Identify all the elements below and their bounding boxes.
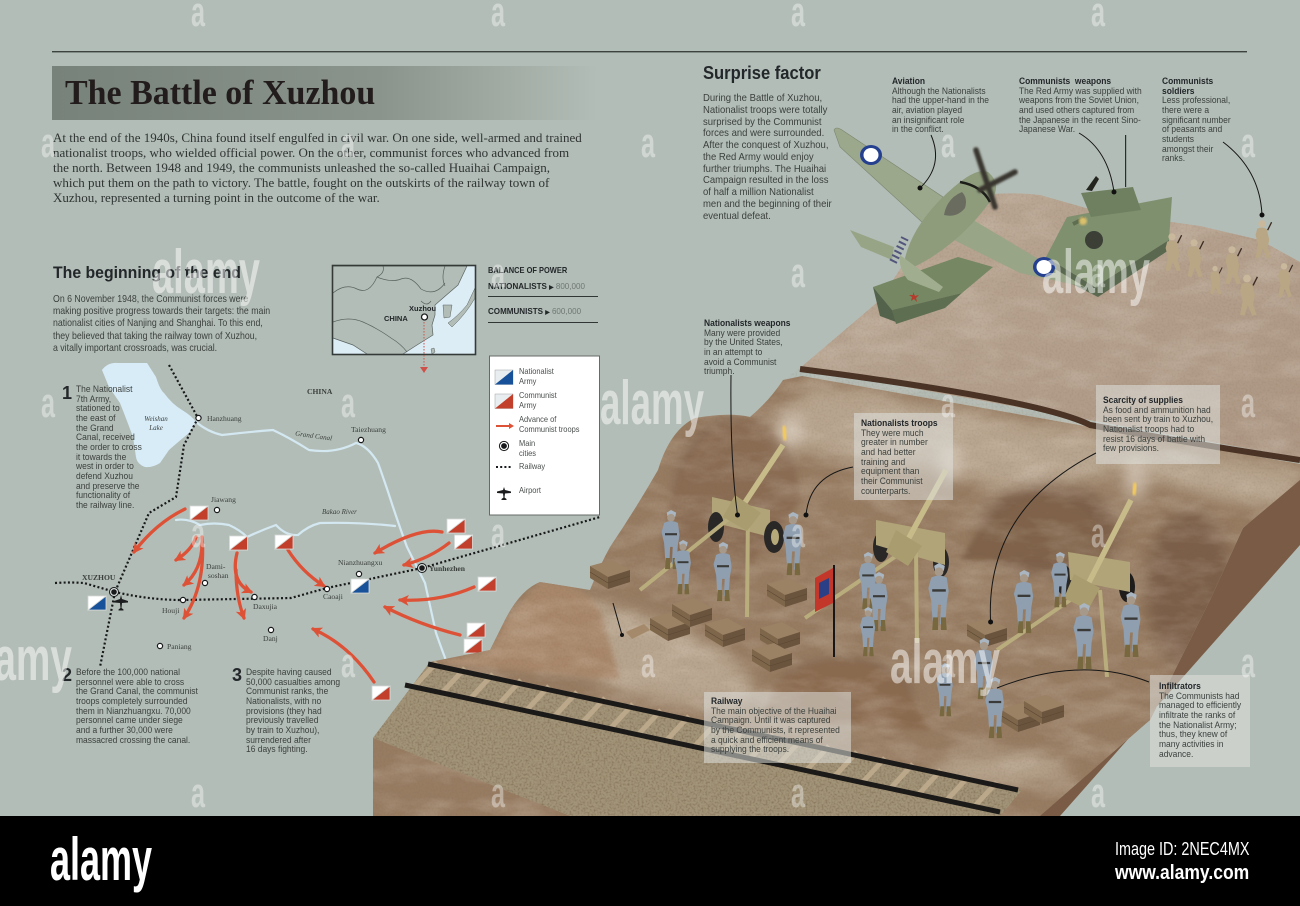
text: the beginning of the end: nationalist cities of Nanjing and Shanghai. To this end, xyxy=(53,318,263,329)
text: the beginning of the end: making positive progress towards their targets: the main xyxy=(53,306,270,317)
callout leader lines xyxy=(613,133,1262,688)
text: surprise factor: of half a million Nationalist xyxy=(703,187,814,198)
text: surprise factor: Nationalist troops were totally xyxy=(703,105,827,116)
step 1 text: The Nationalist xyxy=(76,384,132,394)
step 1 text: Canal, received xyxy=(76,432,135,442)
callout text: infiltrators: The Communists had xyxy=(1159,691,1239,701)
watermark: a xyxy=(491,771,506,817)
map labels: Jiawang xyxy=(211,495,236,504)
diorama: front soil side xyxy=(373,738,570,816)
step 1 text: defend Xuzhou xyxy=(76,471,133,481)
callout text: nationalists troops: counterparts. xyxy=(861,486,910,496)
map labels: Caoaji xyxy=(323,592,343,601)
map: advance arrows xyxy=(134,509,474,682)
callout: communists weapons xyxy=(1019,76,1142,134)
legend label: cities: cities xyxy=(519,449,536,458)
text: surprise factor: forces and were surrounded. xyxy=(703,128,824,139)
watermark: a xyxy=(1091,771,1106,817)
callout: nationalists weapons: in an attempt to xyxy=(704,347,762,357)
map labels: Nianzhuangxu xyxy=(338,558,382,567)
map labels: Daxujia xyxy=(253,602,277,611)
callout text: infiltrators: infiltrate the ranks of xyxy=(1159,710,1235,720)
callout: nationalists weapons: Many were provided xyxy=(704,328,780,338)
callout: aviation: Although the Nationalists xyxy=(892,86,986,96)
step 3 text: 50,000 casualties among xyxy=(246,677,340,687)
diorama: nationalist soldiers xyxy=(662,510,1140,738)
callout text: nationalists troops: They were much xyxy=(861,428,924,438)
text: surprise factor xyxy=(703,93,832,222)
diorama: howitzer 3 xyxy=(997,483,1136,677)
diorama: rails xyxy=(405,664,1018,812)
balance of power: BALANCE OF POWER xyxy=(488,265,567,275)
map labels: Hanzhuang xyxy=(207,414,242,423)
diorama: fighter plane xyxy=(834,128,1085,292)
text: the beginning of the end: On 6 November 1948, the Communist forces were xyxy=(53,294,248,305)
legend labels: Army xyxy=(519,377,536,386)
callout: nationalists weapons: triumph. xyxy=(704,366,735,376)
map: lake xyxy=(102,363,196,467)
callout: communists weapons: Communists weapons xyxy=(1019,76,1111,86)
callout text: nationalists troops: Nationalists troops xyxy=(861,418,938,428)
callout text: railway: Campaign. Until it was captured xyxy=(711,715,830,725)
step 2 text: them in Nianzhuangxu. 70,000 xyxy=(76,706,191,716)
watermark: a xyxy=(41,381,56,427)
step 1 text: functionality of xyxy=(76,490,130,500)
footer bar: alamy xyxy=(50,826,152,893)
text: the beginning of the end: a vitally important crossroads, was crucial. xyxy=(53,343,217,354)
step 1 text: stationed to xyxy=(76,403,120,413)
diorama: howitzer 1 xyxy=(640,426,786,617)
callout: communists soldiers: there were a xyxy=(1162,105,1209,115)
map labels: Paniang xyxy=(167,642,191,651)
step 3 text: 16 days fighting. xyxy=(246,744,308,754)
step 1 text: the Grand xyxy=(76,423,114,433)
watermark: alamy xyxy=(1042,238,1150,307)
watermark: a xyxy=(791,511,806,557)
diorama: tank in rear xyxy=(1046,135,1172,297)
callout text: infiltrators: Infiltrators xyxy=(1159,681,1201,691)
watermark: alamy xyxy=(600,369,704,438)
step 3 text: Despite having caused xyxy=(246,667,332,677)
watermark: a xyxy=(941,381,956,427)
callout: communists weapons: and used others captured from xyxy=(1019,105,1134,115)
diorama: texture xyxy=(373,190,1300,816)
intro text: Xuzhou, represented a turning point in the outcome of the war. xyxy=(53,190,380,204)
map labels: Bakao River xyxy=(322,508,357,516)
step 1 number: 1 xyxy=(62,383,72,403)
watermark: a xyxy=(1241,121,1256,167)
diorama: tank under plane xyxy=(873,257,993,324)
callout text: nationalists troops: greater in number xyxy=(861,437,928,447)
watermark: a xyxy=(1091,511,1106,557)
sand patches xyxy=(514,385,1300,784)
step 1 text: it towards the xyxy=(76,452,126,462)
callout: communists soldiers: amongst their xyxy=(1162,144,1213,154)
callout: communists soldiers: of peasants and xyxy=(1162,124,1222,134)
diorama: upper plateau xyxy=(800,193,1300,458)
legend labels: Nationalist xyxy=(519,367,554,376)
watermark: a xyxy=(791,251,806,297)
callout text: railway: Railway xyxy=(711,696,743,706)
step 3 text: provisions (they had xyxy=(246,706,322,716)
callout text: scarcity of supplies: Nationalist troops had to xyxy=(1103,424,1194,434)
diorama: battlefield terrain block xyxy=(373,190,1300,816)
callout text: infiltrators: advance. xyxy=(1159,749,1193,759)
watermark: a xyxy=(191,771,206,817)
callout: railway xyxy=(704,692,851,763)
callout: aviation: an insignificant role xyxy=(892,115,964,125)
step 1 text: west in order to xyxy=(76,461,134,471)
watermark: a xyxy=(341,641,356,687)
callout text: infiltrators: managed to efficiently xyxy=(1159,700,1241,710)
step 1 text: the east of xyxy=(76,413,116,423)
callout: communists weapons: the Japanese in the recent Sino- xyxy=(1019,115,1141,125)
diorama: right cliff side xyxy=(1030,478,1300,816)
callout text: nationalists troops: equipment than xyxy=(861,466,919,476)
diorama: sleepers xyxy=(413,662,997,808)
callout text: nationalists troops: training and xyxy=(861,457,905,467)
legend label: communist: Communist xyxy=(519,391,557,400)
diorama: communist soldiers xyxy=(1166,220,1293,316)
callout text: infiltrators: the Nationalist Army; xyxy=(1159,720,1237,730)
step 3 text: by train to Xuzhou), xyxy=(246,725,319,735)
diorama: lower terrain xyxy=(373,376,1300,816)
legend label: airport: Airport xyxy=(519,486,541,495)
text: surprise factor: further triumphs. The Huaihai xyxy=(703,164,826,174)
watermark: alamy xyxy=(890,628,1000,697)
balance of power xyxy=(488,265,585,316)
callout: nationalists weapons: by the United States, xyxy=(704,337,783,347)
map labels: Dami- xyxy=(206,562,225,571)
map labels: CHINA xyxy=(307,387,332,396)
callout text: scarcity of supplies: few provisions. xyxy=(1103,443,1159,453)
callout: nationalists troops xyxy=(854,413,952,500)
callout text: scarcity of supplies: Scarcity of supplies xyxy=(1103,395,1183,405)
callout text: nationalists troops: their Communist xyxy=(861,476,923,486)
map labels: Taiezhuang xyxy=(351,425,386,434)
map labels: Lake xyxy=(149,424,163,432)
callout text: infiltrators xyxy=(1159,681,1241,759)
step 3 text: previously travelled xyxy=(246,715,318,725)
legend label: cities: Main xyxy=(519,439,535,448)
locator map labels xyxy=(384,304,436,323)
step 1 text: 7th Army, xyxy=(76,394,111,404)
legend label: communist xyxy=(519,391,557,410)
map labels: Yunhezhen xyxy=(429,564,465,573)
step 2 text: the Grand Canal, the communist xyxy=(76,686,198,696)
watermark: a xyxy=(941,121,956,167)
legend label: communist: Army xyxy=(519,401,536,410)
callout: communists soldiers: Communists xyxy=(1162,76,1213,86)
heading: surprise factor: Surprise factor xyxy=(703,63,821,83)
watermark: a xyxy=(1241,641,1256,687)
legend label: railway: Railway xyxy=(519,462,545,471)
legend labels xyxy=(519,367,554,386)
callout leader dots xyxy=(620,186,1264,637)
callout text: infiltrators: thus, they knew of xyxy=(1159,729,1227,739)
legend label: advance: Communist troops xyxy=(519,425,579,434)
step 1 text: and preserve the xyxy=(76,481,140,491)
callout: aviation xyxy=(892,76,989,134)
title: The Battle of Xuzhou xyxy=(65,73,375,112)
watermark: a xyxy=(491,251,506,297)
text: surprise factor: the Red Army would enjoy xyxy=(703,152,814,163)
step 3 text xyxy=(246,667,340,754)
callout: scarcity of supplies xyxy=(1096,385,1220,464)
map labels: Weishan xyxy=(144,415,168,423)
watermark: a xyxy=(341,121,356,167)
footer bar: www.alamy.com xyxy=(1115,862,1249,884)
callout text: railway: a quick and efficient means of xyxy=(711,735,823,745)
footer bar: Image ID: 2NEC4MX xyxy=(1115,839,1249,859)
step 2 text: massacred crossing the canal. xyxy=(76,735,190,745)
callout text: scarcity of supplies: been sent by train to Xuzhou, xyxy=(1103,414,1213,424)
step 2 text: and a further 30,000 were xyxy=(76,725,173,735)
watermark: a xyxy=(641,641,656,687)
step 1 text: the railway line. xyxy=(76,500,134,510)
map labels xyxy=(82,387,465,651)
step 3 number: 3 xyxy=(232,665,242,685)
watermark: alamy xyxy=(152,238,260,307)
callout: communists weapons: weapons from the Soviet Union, xyxy=(1019,95,1139,105)
text: the beginning of the end: they believed that taking the railway town of Xuzhou, xyxy=(53,331,257,342)
map: airport icon xyxy=(114,595,128,610)
text: surprise factor: After the conquest of Xuzhou, xyxy=(703,140,828,151)
step 2 text: troops completely surrounded xyxy=(76,696,187,706)
callout text: scarcity of supplies xyxy=(1103,395,1213,453)
map: main city markers xyxy=(110,564,426,596)
watermark: a xyxy=(641,121,656,167)
callout: nationalists weapons xyxy=(704,318,791,376)
top rule xyxy=(52,51,1247,52)
callout text: nationalists troops xyxy=(861,418,938,496)
title band xyxy=(52,66,598,120)
watermark: a xyxy=(491,511,506,557)
heading: the beginning of the end: The beginning of the end xyxy=(53,263,241,282)
watermark: a xyxy=(341,381,356,427)
callout text: nationalists troops: and had better xyxy=(861,447,916,457)
text: the beginning of the end xyxy=(53,294,270,354)
legend label: advance: Advance of xyxy=(519,415,556,424)
diorama: mounds xyxy=(430,420,1112,730)
watermark: a xyxy=(1091,251,1106,297)
text: surprise factor: During the Battle of Xuzhou, xyxy=(703,93,822,104)
callout: aviation: in the conflict. xyxy=(892,124,944,134)
callout: communists soldiers: students xyxy=(1162,134,1194,144)
diorama: ammunition crates xyxy=(590,560,1064,732)
diorama: railway bed xyxy=(373,660,1023,816)
text: surprise factor: surprised by the Communist xyxy=(703,116,822,128)
watermark: a xyxy=(191,511,206,557)
watermark: a xyxy=(1241,381,1256,427)
callout text: scarcity of supplies: resist 16 days of battle with xyxy=(1103,434,1205,444)
footer bar xyxy=(0,816,1300,906)
intro text xyxy=(53,130,582,204)
diorama: trench xyxy=(800,369,1300,460)
diorama: howitzer 2 xyxy=(805,470,949,643)
step 2 text xyxy=(76,667,198,745)
map labels: soshan xyxy=(208,571,229,580)
legend xyxy=(490,356,600,515)
step 2 text: personnel came under siege xyxy=(76,715,183,725)
locator pointer xyxy=(420,314,428,373)
step 1 text: the order to cross xyxy=(76,442,142,452)
map: city markers xyxy=(157,415,364,649)
intro text: the north. Between 1948 and 1949, the communists unleashed the so-called Huaihai Campaign, xyxy=(53,160,550,174)
balance of power: NATIONALISTS ▶ 800,000 xyxy=(488,281,585,291)
balance of power: COMMUNISTS ▶ 600,000 xyxy=(488,306,581,316)
step 3 text: Communist ranks, the xyxy=(246,686,328,696)
watermark: a xyxy=(941,641,956,687)
callout: communists soldiers: significant number xyxy=(1162,115,1231,125)
legend label: advance xyxy=(519,415,580,434)
callout: aviation: had the upper-hand in the xyxy=(892,95,989,105)
callout text: infiltrators: many activities in xyxy=(1159,739,1223,749)
callout text: railway: by the Communists, it represented xyxy=(711,725,840,735)
intro text: At the end of the 1940s, China found itself engulfed in civil war. On one side, well-armed and trained xyxy=(53,130,582,144)
text: surprise factor: eventual defeat. xyxy=(703,210,771,222)
map labels: XUZHOU xyxy=(82,573,115,582)
callout: nationalists weapons: avoid a Communist xyxy=(704,357,776,367)
callout text: scarcity of supplies: As food and ammunition had xyxy=(1103,405,1211,415)
text: surprise factor: men and the beginning of their xyxy=(703,199,832,210)
step 3 text: Nationalists, with no xyxy=(246,696,321,706)
callout text: railway: supplying the troops. xyxy=(711,744,789,754)
diorama: muzzle smoke xyxy=(778,412,1148,504)
callout: communists soldiers: ranks. xyxy=(1162,153,1185,163)
callout: infiltrators xyxy=(1150,675,1250,767)
locator map labels: CHINA xyxy=(384,314,408,323)
callout: nationalists weapons: Nationalists weapons xyxy=(704,318,791,328)
map labels: Grand Canal xyxy=(295,429,333,443)
callout: aviation: air, aviation played xyxy=(892,105,962,115)
callout: communists weapons: The Red Army was supplied with xyxy=(1019,86,1142,96)
step 3 text: surrendered after xyxy=(246,735,311,745)
step 2 text: Before the 100,000 national xyxy=(76,667,180,677)
callout: aviation: Aviation xyxy=(892,76,925,86)
callout text: railway: The main objective of the Huaihai xyxy=(711,706,837,716)
watermark: a xyxy=(791,771,806,817)
intro text: nationalist troops, who wielded official power. On the other, communist forces who advanced from xyxy=(53,144,569,160)
callout: communists soldiers: soldiers xyxy=(1162,86,1194,96)
text: surprise factor: Campaign resulted in the loss xyxy=(703,175,828,186)
callout: communists weapons: Japanese War. xyxy=(1019,124,1075,134)
legend label: cities xyxy=(519,439,536,458)
step 1 text xyxy=(76,384,142,510)
map: communist army flags xyxy=(190,506,496,700)
intro text: which put them on the path to victory. The battle, fought on the outskirts of the railway town of xyxy=(53,174,549,190)
map: nationalist army flags xyxy=(88,579,369,610)
inset locator map xyxy=(332,266,476,354)
locator map labels: Xuzhou xyxy=(409,304,436,313)
balance of power rules xyxy=(488,296,598,322)
map: railway xyxy=(55,365,600,667)
watermark: a xyxy=(41,121,56,167)
diorama: nationalist flag xyxy=(815,565,835,657)
callout text: railway xyxy=(711,696,840,754)
step 2 number: 2 xyxy=(62,665,72,685)
map labels: Houji xyxy=(162,606,179,615)
callout: communists soldiers xyxy=(1162,76,1231,163)
map labels: Danj xyxy=(263,634,278,643)
callout: communists soldiers: Less professional, xyxy=(1162,95,1230,105)
map: rivers xyxy=(176,422,447,663)
step 2 text: personnel were able to cross xyxy=(76,677,184,687)
